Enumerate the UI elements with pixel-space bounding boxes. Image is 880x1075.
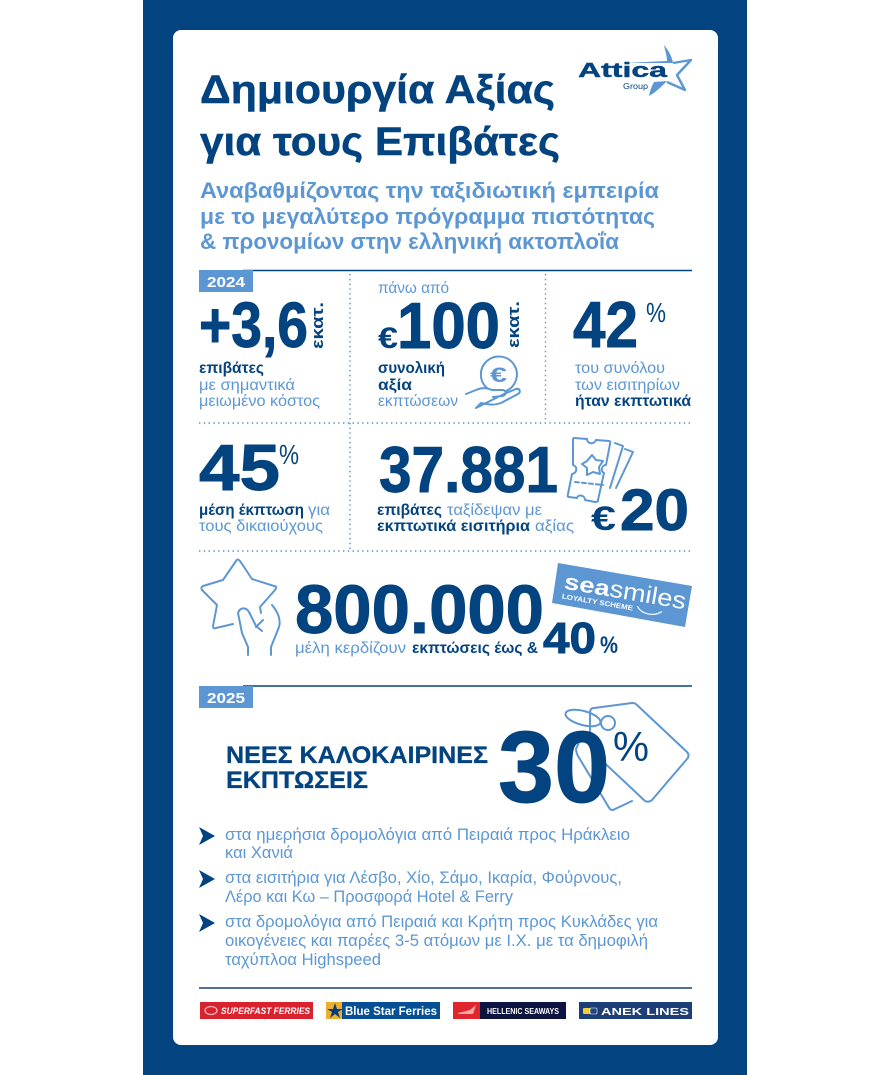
bullet 1: στα ημερήσια δρομολόγια από Πειραιά προς Ηράκλειο: [225, 825, 630, 844]
stat: over 100 million euro: [378, 280, 523, 410]
stat: 45%: για: [308, 502, 330, 519]
bullet 3: οικογένειες και παρέες 3-5 ατόμων με Ι.Χ. με τα δημοφιλή: [225, 931, 648, 950]
stat: 42%: των εισιτηρίων: [575, 377, 680, 394]
logo: Anek Lines: [579, 1002, 692, 1019]
year tag 2025: 2025: [207, 690, 245, 707]
stat: 45%: %: [279, 439, 299, 470]
subtitle: & προνομίων στην ελληνική ακτοπλοΐα: [200, 229, 619, 254]
stat: 37.881 passengers at 20 euro: επιβάτες: [377, 502, 442, 519]
title: για τους Επιβάτες: [200, 120, 560, 164]
stat: over 100 million euro: εκατ.: [504, 301, 523, 348]
logo: Superfast Ferries: [200, 1002, 313, 1019]
stat: 45%: τους δικαιούχους: [199, 518, 323, 535]
stat: 42%: ήταν εκπτωτικά: [575, 393, 691, 410]
stat: +3,6 million passengers: [199, 289, 327, 410]
bullet 3: στα δρομολόγια από Πειραιά και Κρήτη προς Κυκλάδες για: [225, 912, 658, 931]
title: Δημιουργία Αξίας: [200, 68, 555, 112]
stat: 800.000 members: 800.000: [295, 571, 544, 648]
stat: 800.000 members: [295, 571, 618, 663]
logo: Hellenic Seaways: HELLENIC SEAWAYS: [487, 1006, 559, 1016]
year tag 2025: [199, 686, 253, 708]
heading: new summer discounts: ΝΕΕΣ ΚΑΛΟΚΑΙΡΙΝΕΣ: [226, 742, 488, 769]
icon: price tags: [564, 703, 688, 810]
bullet 1: [199, 825, 630, 862]
stat: over 100 million euro: εκπτώσεων: [378, 393, 458, 410]
logo: seasmiles loyalty scheme: [552, 563, 692, 627]
stat: over 100 million euro: €: [378, 322, 398, 355]
logo: seasmiles loyalty scheme: LOYALTY SCHEME: [561, 593, 634, 613]
stat: +3,6 million passengers: +3,6: [199, 289, 308, 361]
heading: new summer discounts: ΕΚΠΤΩΣΕΙΣ: [226, 767, 368, 794]
stat: over 100 million euro: πάνω από: [378, 280, 449, 297]
stat: +3,6 million passengers: επιβάτες: [199, 360, 264, 377]
logo: seasmiles loyalty scheme: smiles: [608, 576, 688, 615]
stat: 30%: 30: [498, 712, 610, 824]
icon: tickets: [568, 438, 633, 502]
logo: Blue Star Ferries: Blue Star Ferries: [345, 1004, 437, 1018]
icon: hand touching star: [201, 560, 280, 655]
bullet 2: στα εισιτήρια για Λέσβο, Χίο, Σάμο, Ικαρία, Φούρνους,: [225, 868, 622, 887]
icon: hand holding euro coin: [466, 356, 520, 408]
stat: 42%: 42: [573, 288, 638, 361]
stat: 45%: μέση έκπτωση: [199, 502, 304, 519]
year tag 2024: [199, 270, 253, 292]
stat: 37.881 passengers at 20 euro: 37.881: [379, 433, 558, 506]
year tag 2024: 2024: [207, 274, 246, 291]
bullet list: [199, 825, 658, 969]
logo: Attica Group: [578, 45, 691, 96]
subtitle: Αναβαθμίζοντας την ταξιδιωτική εμπειρία: [200, 178, 659, 203]
stat: 37.881 passengers at 20 euro: €: [591, 500, 616, 538]
stat: 800.000 members: 40: [543, 614, 596, 663]
bullet 2: Λέρο και Κω – Προσφορά Hotel & Ferry: [225, 887, 513, 906]
stat: 30%: %: [613, 723, 649, 770]
title: [200, 68, 560, 164]
stat: 37.881 passengers at 20 euro: ταξίδεψαν με: [447, 502, 542, 519]
bullet 1: και Χανιά: [225, 843, 293, 862]
stat: 37.881 passengers at 20 euro: [377, 433, 689, 543]
heading: new summer discounts: [226, 742, 488, 794]
stat: over 100 million euro: συνολική: [378, 360, 445, 377]
logo: Attica Group: Attica: [578, 60, 668, 82]
stat: 800.000 members: μέλη κερδίζουν: [295, 640, 406, 657]
subtitle: με το μεγαλύτερο πρόγραμμα πιστότητας: [200, 204, 655, 229]
logo: Blue Star Ferries: [326, 1002, 440, 1019]
stat: 37.881 passengers at 20 euro: εκπτωτικά εισιτήρια: [377, 518, 530, 535]
stat: 42%: [573, 288, 691, 410]
bullet 3: [199, 912, 658, 969]
stat: +3,6 million passengers: εκατ.: [308, 302, 327, 349]
stat: 42%: %: [646, 297, 666, 328]
logo: Anek Lines: ANEK LINES: [601, 1007, 689, 1018]
subtitle: [200, 178, 659, 254]
stat: 42%: του συνόλου: [575, 360, 665, 377]
logo: Attica Group: Group: [623, 82, 649, 91]
stat: 37.881 passengers at 20 euro: 20: [620, 478, 689, 543]
bullet 2: [199, 868, 622, 906]
stat: 45%: 45: [199, 431, 280, 504]
icon: hand holding euro coin: €: [490, 364, 507, 387]
stat: 800.000 members: εκπτώσεις έως &: [412, 640, 538, 657]
logo: Superfast Ferries: SUPERFAST FERRIES: [221, 1006, 310, 1016]
blue backdrop: [143, 0, 747, 1075]
white card: [173, 30, 718, 1045]
stat: +3,6 million passengers: μειωμένο κόστος: [199, 393, 320, 410]
stat: over 100 million euro: αξία: [378, 377, 413, 394]
stat: 45%: [199, 431, 330, 535]
logo: seasmiles loyalty scheme: sea: [562, 569, 613, 601]
stat: over 100 million euro: 100: [397, 289, 500, 362]
bullet 3: ταχύπλοα Highspeed: [225, 950, 381, 969]
stat: +3,6 million passengers: με σημαντικά: [199, 377, 295, 394]
stat: 800.000 members: %: [600, 632, 618, 659]
logo: Hellenic Seaways: [453, 1002, 566, 1019]
stat: 37.881 passengers at 20 euro: αξίας: [535, 518, 574, 535]
